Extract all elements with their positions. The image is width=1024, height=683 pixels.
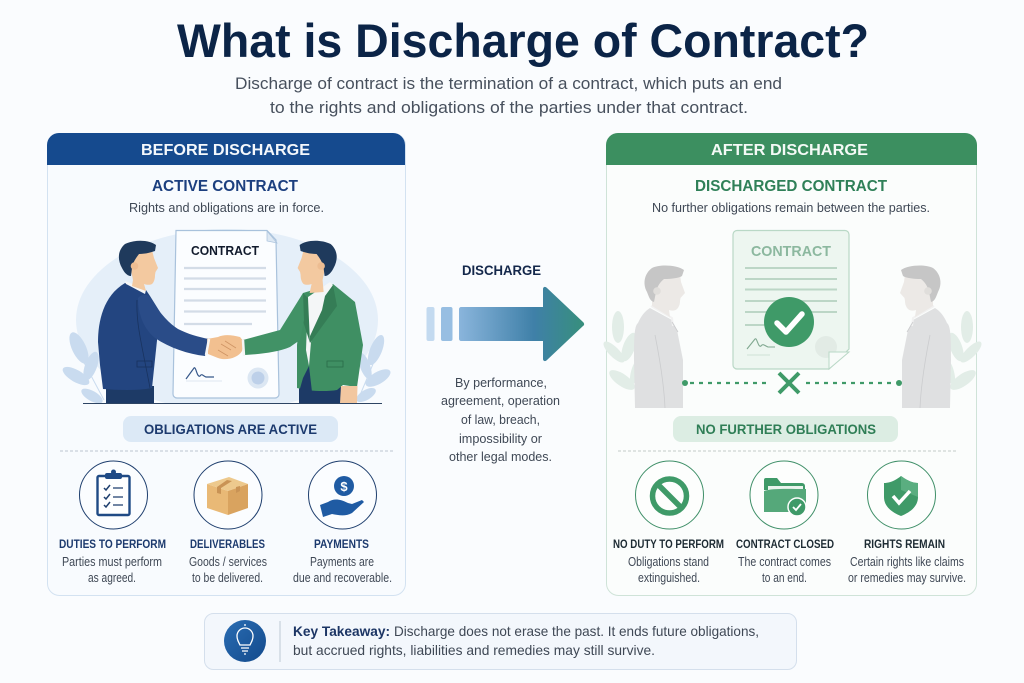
item: no duty to perform: NO DUTY TO PERFORM: [613, 539, 724, 551]
item: duties to perform: [59, 461, 166, 585]
severed link: [682, 373, 902, 393]
illustration: separated parties: [601, 230, 984, 408]
icon: hand with coin: $: [340, 479, 348, 494]
item: deliverables: DELIVERABLES: [190, 539, 265, 551]
item: rights remain: or remedies may survive.: [848, 571, 966, 585]
key takeaway callout: [204, 614, 796, 670]
item: payments: due and recoverable.: [293, 571, 392, 585]
item: contract closed: CONTRACT CLOSED: [736, 539, 834, 551]
before header: BEFORE DISCHARGE: [141, 142, 310, 159]
before subtitle: ACTIVE CONTRACT: [152, 178, 299, 195]
item: payments: [293, 461, 392, 585]
handshake: [206, 335, 244, 359]
faded contract document: CONTRACT: [751, 243, 831, 260]
discharge modes: impossibility or: [459, 432, 542, 446]
after status pill: NO FURTHER OBLIGATIONS: [696, 422, 876, 437]
icon: clipboard: [98, 470, 130, 515]
icon: folder with check: [764, 478, 806, 516]
before status pill: OBLIGATIONS ARE ACTIVE: [144, 422, 317, 437]
item: rights remain: Certain rights like claims: [850, 555, 964, 569]
item: payments: PAYMENTS: [314, 539, 369, 551]
arrow: [426, 287, 584, 361]
green check badge: [764, 297, 814, 347]
left man, navy suit: [98, 241, 209, 403]
after subtitle: DISCHARGED CONTRACT: [695, 178, 888, 195]
takeaway text: Key Takeaway:: [293, 623, 390, 639]
item: duties to perform: as agreed.: [88, 571, 136, 585]
discharge modes: [441, 376, 560, 464]
panel: after discharge: [601, 133, 984, 596]
leaves right: [354, 333, 393, 405]
takeaway text: [293, 623, 759, 658]
illustration: handshake over contract: [60, 229, 393, 411]
item: payments: Payments are: [310, 555, 374, 569]
icon: prohibited: [652, 479, 686, 513]
item: deliverables: to be delivered.: [192, 571, 263, 585]
icon: light bulb: [224, 620, 266, 662]
baseline: [83, 402, 382, 404]
takeaway text: but accrued rights, liabilities and remedies may still survive.: [293, 642, 655, 658]
before status pill: [123, 416, 338, 442]
after header: [606, 133, 977, 165]
leaves left: [60, 330, 105, 406]
item: no duty to perform: Obligations stand: [628, 555, 709, 569]
before description: Rights and obligations are in force.: [129, 200, 324, 215]
intro text: Discharge of contract is the termination of a contract, which puts an end: [235, 74, 782, 93]
contract document: [173, 230, 279, 398]
contract document: CONTRACT: [191, 243, 259, 258]
right man, green suit: [243, 241, 363, 403]
takeaway text: Discharge does not erase the past. It ends future obligations,: [394, 623, 759, 639]
panel: before discharge: [47, 133, 406, 596]
item: no duty to perform: [613, 461, 724, 585]
item: no duty to perform: extinguished.: [638, 571, 700, 585]
icon: shield: [884, 476, 918, 516]
discharge label: DISCHARGE: [462, 263, 541, 278]
item: duties to perform: Parties must perform: [62, 555, 162, 569]
discharge modes: By performance,: [455, 376, 547, 390]
discharge modes: of law, breach,: [461, 413, 540, 427]
faded contract document: [733, 230, 849, 369]
icon: box: [207, 477, 248, 515]
discharge modes: other legal modes.: [449, 450, 552, 464]
after header: AFTER DISCHARGE: [711, 142, 868, 159]
after description: No further obligations remain between the parties.: [652, 200, 930, 215]
discharge modes: agreement, operation: [441, 394, 560, 408]
item: contract closed: [736, 461, 834, 585]
item: contract closed: to an end.: [762, 571, 807, 585]
item: deliverables: [189, 461, 267, 585]
item: rights remain: [848, 461, 966, 585]
title: What is Discharge of Contract?: [177, 14, 869, 67]
intro text: to the rights and obligations of the parties under that contract.: [270, 98, 748, 117]
intro text: [235, 74, 782, 117]
ghost person right with leaves: [900, 266, 984, 408]
ghost person left with leaves: [601, 266, 685, 408]
item: deliverables: Goods / services: [189, 555, 267, 569]
item: rights remain: RIGHTS REMAIN: [864, 539, 945, 551]
item: contract closed: The contract comes: [738, 555, 831, 569]
discharge arrow column: [426, 263, 584, 464]
before header: [47, 133, 405, 165]
after status pill: [673, 416, 898, 442]
item: duties to perform: DUTIES TO PERFORM: [59, 539, 166, 551]
